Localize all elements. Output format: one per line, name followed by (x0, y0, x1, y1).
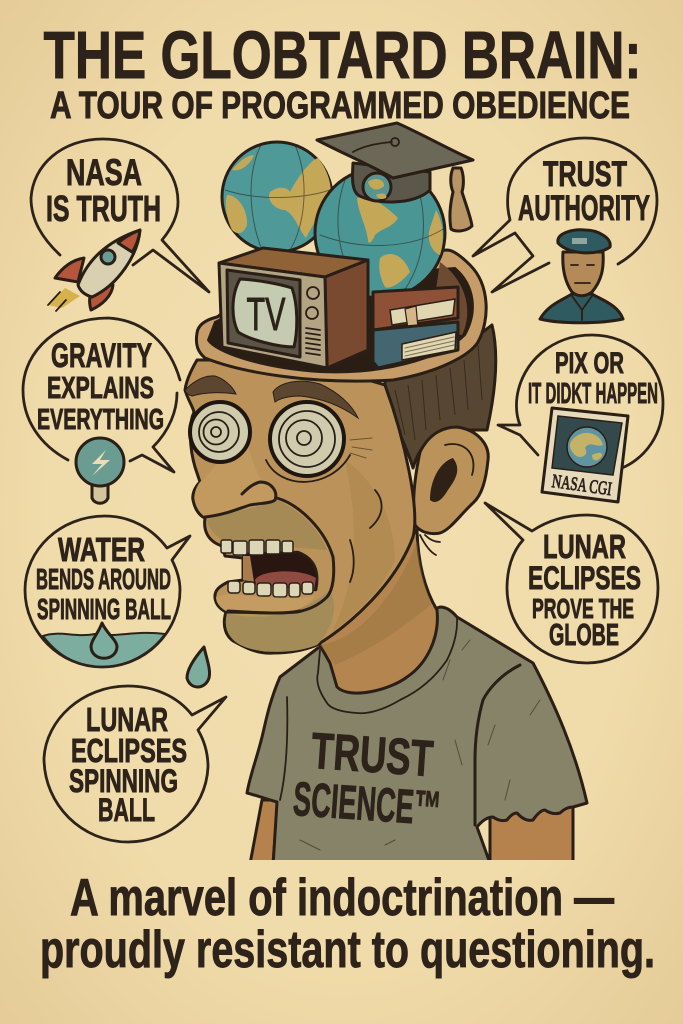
water surface (43, 633, 165, 667)
bubble: gravity explains everything (23, 318, 180, 472)
bubble: lunar eclipses spinning ball: LUNAR (86, 701, 168, 738)
icon: hypnotised left eye (190, 402, 250, 462)
footer tagline (40, 869, 655, 979)
bubble: NASA is truth: IS TRUTH (46, 188, 161, 229)
shirt slogan: SCIENCE: SCIENCE™ (291, 773, 443, 836)
icon: NASA CGI photo (542, 408, 628, 502)
open skull rim (196, 250, 486, 381)
stacked books (373, 287, 458, 368)
bubble: water bends around spinning ball: BENDS AROUND (36, 564, 171, 596)
icon: hypnotised right eye (266, 402, 372, 482)
bubble: trust authority: TRUST (543, 155, 627, 194)
icon: water drop (91, 623, 117, 658)
bubble: NASA is truth (31, 139, 209, 292)
bubble: gravity explains everything: GRAVITY (51, 337, 152, 375)
t-shirt (247, 607, 587, 866)
television (219, 248, 368, 368)
icon: lightbulb (76, 438, 124, 503)
left arm (250, 800, 278, 864)
bubble: lunar eclipses prove the globe: LUNAR (543, 528, 626, 565)
TV label: TV (246, 288, 286, 340)
tassel (450, 168, 472, 231)
right arm (490, 805, 573, 864)
bubble: water bends around spinning ball (25, 516, 190, 667)
icon: police officer (540, 230, 623, 323)
hair (385, 325, 496, 555)
bubble: lunar eclipses spinning ball: ECLIPSES (71, 732, 187, 769)
bubble: trust authority (473, 138, 657, 292)
bubble: water bends around spinning ball: WATER (58, 531, 145, 568)
icon: rocket (48, 230, 140, 311)
face (185, 360, 415, 653)
neck (317, 530, 437, 693)
lower teeth (228, 581, 313, 597)
ear (414, 427, 488, 534)
bubble: water bends around spinning ball: SPINNING BALL (37, 594, 171, 626)
skull cavity (208, 268, 473, 372)
lower lip (216, 594, 315, 612)
stubble: upper lip (207, 500, 327, 550)
bubble: lunar eclipses spinning ball: SPINNING (69, 763, 178, 799)
illustration: man with open head (185, 123, 587, 866)
bubble: NASA is truth: NASA (66, 152, 142, 193)
bubble: gravity explains everything: EXPLAINS (47, 370, 154, 405)
graduation cap (317, 123, 473, 231)
left globe (222, 142, 332, 252)
bubble: pix or it didnt happen: PIX OR (555, 347, 624, 380)
eyebrow left (185, 376, 236, 396)
eyebrow right (273, 381, 358, 418)
nose (195, 480, 336, 614)
bubble: pix or it didnt happen (498, 335, 663, 468)
cheek shading (332, 460, 395, 632)
bubble: lunar eclipses prove the globe: GLOBE (549, 617, 619, 652)
shirt slogan: TRUST: TRUST (309, 722, 435, 787)
bubble: lunar eclipses spinning ball: BALL (98, 792, 155, 828)
bubble: lunar eclipses prove the globe (485, 503, 658, 663)
bubble: lunar eclipses prove the globe: ECLIPSES (528, 560, 641, 596)
mouth with teeth (216, 490, 382, 613)
bubble: lunar eclipses spinning ball (44, 686, 226, 842)
bubble: gravity explains everything: EVERYTHING (37, 404, 164, 436)
photo caption: NASA CGI (551, 471, 613, 500)
stubble: chin (226, 590, 334, 652)
icon: falling drop (187, 647, 210, 687)
right globe (315, 168, 445, 298)
upper teeth (221, 540, 293, 555)
